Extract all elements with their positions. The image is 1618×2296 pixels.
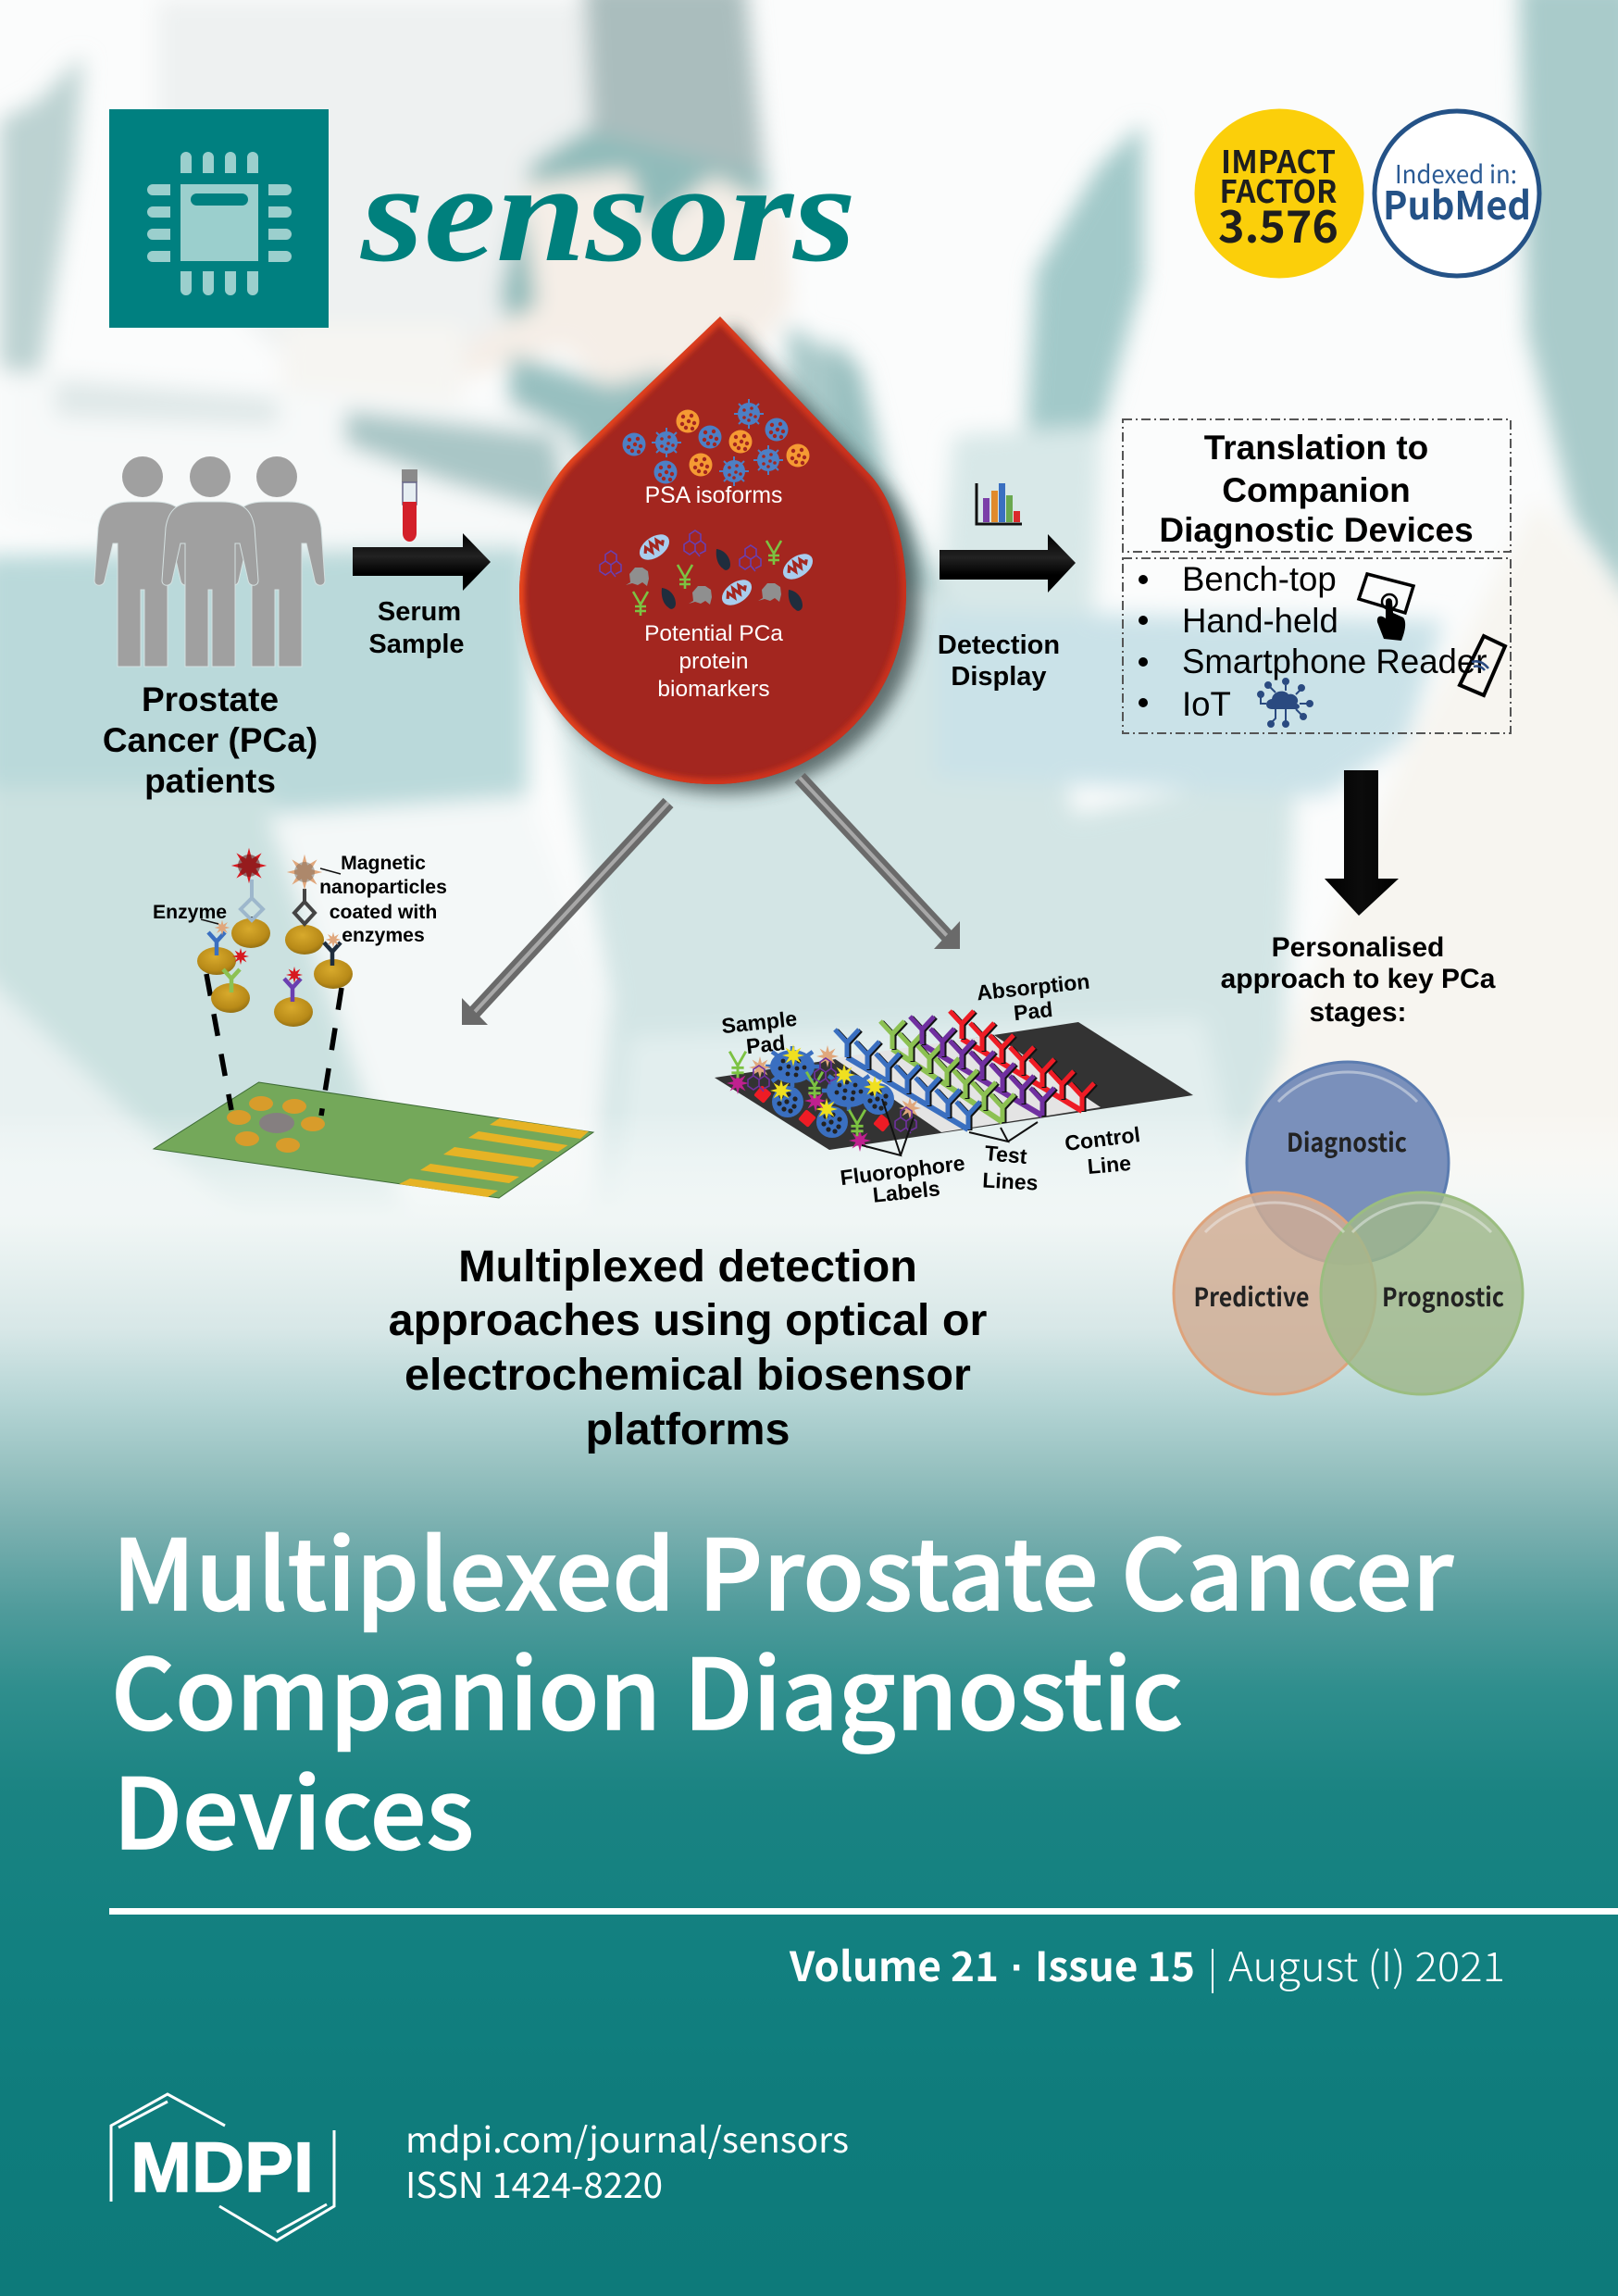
patients label <box>103 680 317 800</box>
venn diagram: Predictive <box>1194 1278 1309 1315</box>
impact factor badge: IMPACT <box>1221 137 1336 182</box>
detection display label: Display <box>951 662 1047 692</box>
article title: Multiplexed Prostate Cancer <box>112 1498 1454 1639</box>
fluorophore labelled particles <box>727 1044 921 1152</box>
personalised approach label: stages: <box>1309 997 1407 1028</box>
patients label: patients <box>144 762 276 800</box>
patients label: Prostate <box>142 680 279 718</box>
biomarkers label: Potential PCa <box>644 621 783 646</box>
icon: bar chart <box>977 483 1022 524</box>
teal gradient band <box>0 1111 1618 2296</box>
icon: blood test tube <box>402 469 417 542</box>
MDPI logo <box>111 2094 334 2240</box>
absorption pad label: Pad <box>1013 997 1054 1025</box>
magnetic nanoparticles label: nanoparticles <box>319 877 447 898</box>
volume and issue line: Issue 15 <box>1035 1934 1195 1993</box>
biomarkers label <box>644 621 783 702</box>
journal URL and ISSN: ISSN 1424-8220 <box>405 2157 663 2208</box>
multiplexed detection caption <box>389 1242 988 1454</box>
volume and issue line: · <box>1011 1945 1025 1990</box>
serum sample label: Serum <box>378 597 461 627</box>
device list: Bench-top <box>1182 560 1337 598</box>
magnetic nanoparticles label: enzymes <box>342 925 425 946</box>
sample pad label: Sample <box>720 1006 798 1038</box>
device list: IoT <box>1182 685 1231 723</box>
impact factor badge: FACTOR <box>1220 167 1337 212</box>
dashed zoom lines <box>206 974 342 1116</box>
magnetic nanoparticles label <box>319 853 447 946</box>
serum sample label: Sample <box>368 630 465 659</box>
biomarkers label: protein <box>679 649 748 674</box>
impact factor badge: 3.576 <box>1218 191 1338 256</box>
devices heading: Companion <box>1222 471 1411 509</box>
divider rule <box>109 1908 1618 1915</box>
MDPI logo: MDPI <box>131 2128 314 2207</box>
multiplexed detection caption: platforms <box>586 1404 790 1454</box>
test lines label <box>982 1141 1039 1195</box>
venn diagram: Prognostic <box>1382 1278 1504 1315</box>
personalised approach label <box>1221 932 1496 1028</box>
lateral flow strip illustration <box>715 969 1193 1207</box>
panel: translation to companion diagnostic devices <box>1123 419 1511 733</box>
icon: smartphone <box>1460 636 1505 695</box>
device list: Hand-held <box>1182 602 1338 640</box>
personalised approach label: approach to key PCa <box>1221 964 1496 994</box>
icon: tablet and hand <box>1359 574 1413 641</box>
sample pad label <box>720 1006 798 1058</box>
arrow: serum to drop <box>353 533 491 591</box>
sensor board <box>154 1082 593 1198</box>
capture antibodies <box>835 1011 1096 1130</box>
arrow: devices to personalised approach <box>1325 770 1399 916</box>
devices heading: Translation to <box>1204 429 1428 467</box>
absorption pad label: Absorption <box>976 969 1091 1004</box>
PSA isoform particles <box>622 399 809 486</box>
journal URL and ISSN: mdpi.com/journal/sensors <box>405 2112 849 2163</box>
sample pad label: Pad <box>745 1030 787 1058</box>
journal URL and ISSN <box>405 2112 849 2208</box>
multiplexed detection caption: electrochemical biosensor <box>404 1350 971 1400</box>
control line label: Control <box>1064 1122 1141 1155</box>
electrochemical sensor illustration <box>153 848 593 1198</box>
patients label: Cancer (PCa) <box>103 721 317 759</box>
background photo <box>0 0 1618 1296</box>
detection display label <box>938 630 1060 692</box>
patients group icon <box>94 456 325 667</box>
arrow: drop to electrochemical sensor <box>462 803 668 1025</box>
fluorophore labels label <box>839 1151 966 1207</box>
multiplexed detection caption: Multiplexed detection <box>458 1242 917 1292</box>
venn diagram: Diagnostic <box>1287 1123 1407 1160</box>
volume and issue line: Volume 21 <box>789 1934 999 1993</box>
strip pads <box>715 1022 1193 1150</box>
icon: IoT cloud <box>1258 679 1313 727</box>
enzyme label: Enzyme <box>153 902 227 923</box>
absorption pad label <box>976 969 1091 1025</box>
test lines label: Test <box>984 1141 1028 1168</box>
device list: Smartphone Reader <box>1182 643 1487 680</box>
arrow: drop to devices <box>940 534 1076 593</box>
article title: Devices <box>113 1737 474 1878</box>
personalised approach label: Personalised <box>1272 932 1444 963</box>
magnetic nanoparticles label: coated with <box>330 902 437 923</box>
devices heading <box>1159 429 1474 549</box>
PSA isoforms label: PSA isoforms <box>645 483 782 508</box>
control line label <box>1064 1122 1141 1179</box>
leader lines <box>862 1099 1038 1155</box>
gold nanoparticle beads with antibodies <box>197 848 353 1027</box>
article title: Companion Diagnostic <box>111 1617 1183 1758</box>
detection display label: Detection <box>938 630 1060 660</box>
PubMed badge: Indexed in: <box>1395 155 1517 191</box>
PubMed badge: PubMed <box>1383 175 1531 231</box>
test lines label: Lines <box>982 1167 1039 1195</box>
serum sample label <box>368 597 465 659</box>
PubMed badge <box>1375 111 1539 276</box>
fluorophore labels label: Fluorophore <box>839 1151 966 1190</box>
protein biomarker icons <box>600 530 817 616</box>
devices heading: Diagnostic Devices <box>1159 511 1474 549</box>
arrow: drop to lateral flow strip <box>800 778 960 949</box>
article title <box>111 1498 1454 1878</box>
multiplexed detection caption: approaches using optical or <box>389 1295 988 1345</box>
volume and issue line <box>789 1934 1505 1993</box>
blood drop panel <box>519 317 919 793</box>
journal name: sensors <box>360 135 856 291</box>
magnetic nanoparticles label: Magnetic <box>341 853 426 874</box>
volume and issue line: August (I) 2021 <box>1228 1934 1505 1993</box>
venn diagram <box>1174 1062 1523 1394</box>
fluorophore labels label: Labels <box>872 1176 941 1207</box>
biomarkers label: biomarkers <box>657 677 770 702</box>
impact factor badge <box>1194 109 1364 278</box>
device list <box>1139 560 1487 723</box>
control line label: Line <box>1087 1151 1132 1179</box>
journal logo tile <box>109 109 329 328</box>
